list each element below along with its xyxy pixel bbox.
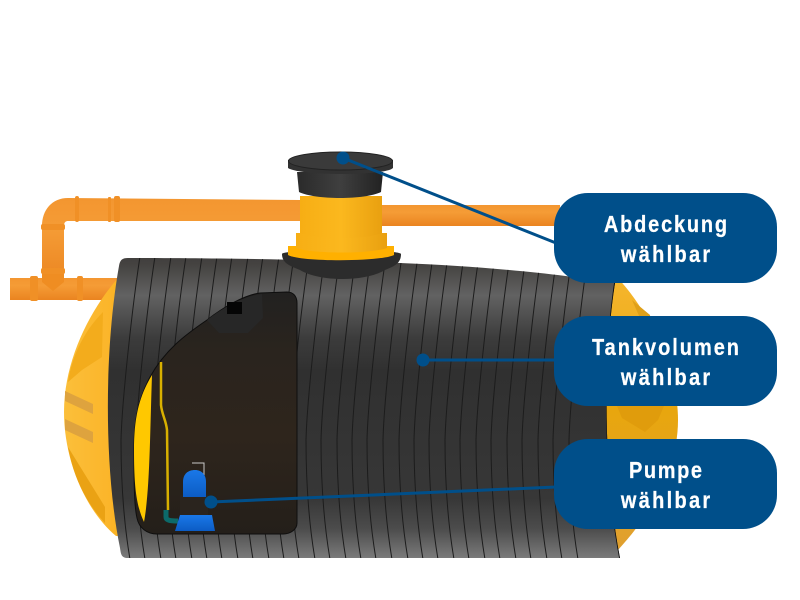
pipe collars <box>30 196 120 301</box>
cover top <box>288 152 392 170</box>
upper pipe run <box>42 198 300 285</box>
discharge elbow <box>166 510 178 521</box>
end cap right <box>605 272 678 550</box>
end cap left <box>64 278 130 536</box>
pipe tee <box>42 272 64 291</box>
pipework <box>10 196 560 301</box>
pump dome <box>183 470 206 497</box>
ring bottom <box>288 246 394 260</box>
ring middle <box>296 233 387 252</box>
cap recesses <box>632 300 652 335</box>
lower recess <box>68 447 105 523</box>
shaft riser <box>282 152 401 279</box>
vent slot bottom <box>65 419 93 443</box>
inlet opening <box>227 302 242 314</box>
pump base <box>175 515 215 531</box>
flange <box>282 250 401 279</box>
inner yellow wall <box>134 375 152 522</box>
callout: Pumpe: wählbar <box>620 486 711 513</box>
inlet baffle <box>207 294 263 333</box>
float cable <box>161 362 168 510</box>
pump collar <box>180 495 208 515</box>
ribs <box>121 250 589 565</box>
callout leader: Tankvolumen <box>416 354 556 366</box>
tank body <box>90 250 630 565</box>
callout: Tankvolumen: wählbar <box>620 363 711 390</box>
riser body <box>300 196 382 238</box>
right rim <box>608 280 621 560</box>
neck <box>297 172 383 198</box>
callout: Tankvolumen: Tankvolumen <box>592 333 739 360</box>
callout: Abdeckung: wählbar <box>620 240 711 267</box>
cover rim <box>288 160 393 174</box>
callout leader: Abdeckung <box>336 152 556 243</box>
upper recess <box>68 312 103 382</box>
callout: Abdeckung: Abdeckung <box>604 210 727 237</box>
callout: Pumpe: Pumpe <box>629 456 702 483</box>
callout leader: Pumpe <box>204 487 556 508</box>
vent slot top <box>65 391 93 414</box>
pump handle <box>192 463 204 478</box>
callout: Pumpe <box>554 439 777 529</box>
right pipe run <box>380 205 560 226</box>
pump <box>175 463 215 531</box>
callout: Abdeckung <box>554 193 777 283</box>
callout: Tankvolumen <box>554 316 777 406</box>
cutaway interior <box>134 292 297 534</box>
lower pipe run <box>10 278 120 300</box>
